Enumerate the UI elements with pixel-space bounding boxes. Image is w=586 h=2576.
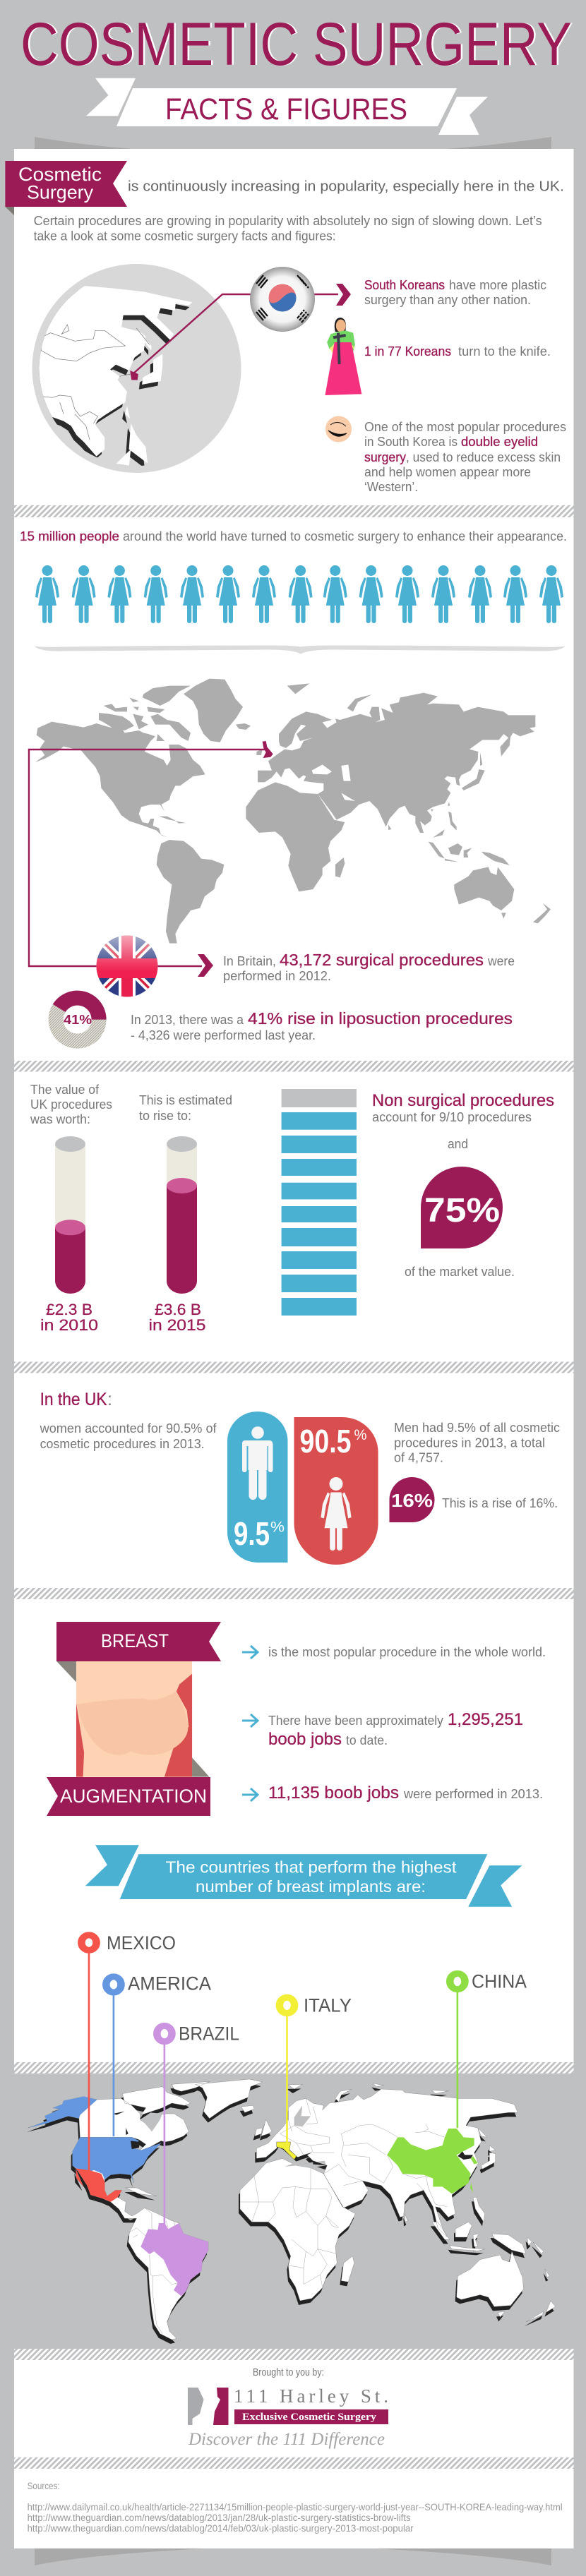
- panel top tabs: [35, 137, 551, 149]
- text: 1 in 77 Koreans: 1 in 77 Koreans: [364, 344, 451, 359]
- text: 41% rise in liposuction: 41% rise in liposuction procedures: [248, 1009, 513, 1028]
- text: women share: [40, 1421, 217, 1451]
- ribbon: BREAST: BREAST: [101, 1630, 169, 1651]
- icon: eye: [325, 416, 352, 442]
- logo: 111 Harley St: Exclusive Cosmetic Surgery: [242, 2412, 377, 2423]
- heading: In the UK: :: [107, 1390, 112, 1409]
- label: China: CHINA: [472, 1970, 527, 1992]
- connector line: Korea to text: [133, 294, 338, 374]
- text: 1,295,251 boob jobs: There have been approximately: [268, 1714, 443, 1728]
- text: sources: Sources:: [28, 2481, 60, 2491]
- panel: main white: [14, 149, 573, 2062]
- text: South Koreans: South Koreans: [364, 278, 445, 292]
- panel: men 9.5%: %: [270, 1519, 285, 1536]
- ribbon: AUGMENTATION: AUGMENTATION: [60, 1786, 207, 1807]
- logo: 111 Harley St: [188, 2385, 388, 2449]
- text: 43,172 surgical procedures: performed in 2012.: [223, 969, 331, 983]
- text: non surgical procedures: Non surgical procedures: [372, 1091, 554, 1110]
- text: sources: http://www.theguardian.com/news/datablog/2014/feb/03/uk-plastic-surgery-2013-most-popular: [28, 2523, 414, 2534]
- intro text: take a look at some cosmetic surgery facts and figures:: [34, 229, 336, 243]
- text: men share: [394, 1421, 560, 1465]
- text: 41% rise in liposuction: In 2013, there was a: [131, 1013, 244, 1027]
- label: 2015 value: in 2015: [148, 1316, 206, 1334]
- connector line: UK to text: [29, 750, 265, 966]
- panel: women 90.5%: [294, 1417, 378, 1565]
- label: 2010 value: £2.3 B: [46, 1301, 92, 1318]
- icon: man: [242, 1426, 273, 1500]
- text: men share: procedures in 2013, a total: [394, 1436, 545, 1450]
- chart: cylinder 2015: [167, 1136, 197, 1294]
- label: 2015 value: [148, 1301, 206, 1334]
- text: brought to you by: Brought to you by:: [253, 2366, 324, 2378]
- text: ribbon heading: number of breast implants are:: [196, 1877, 426, 1896]
- logo: 111 Harley St: Discover the 111 Difference: [188, 2430, 385, 2449]
- arrowhead: UK: [198, 954, 213, 977]
- text: sources: [28, 2481, 563, 2534]
- text: value of UK procedures: [30, 1083, 112, 1126]
- text: 1 in 77 Koreans: [364, 344, 551, 359]
- text: sources: http://www.theguardian.com/news/datablog/2013/jan/28/uk-plastic-surgery-statistics-brow-lifts: [28, 2512, 411, 2523]
- ribbon: highest number of implants: [85, 1845, 522, 1907]
- text: market value: of the market value.: [405, 1265, 515, 1279]
- text: 41% rise in liposuction: - 4,326 were performed last year.: [131, 1028, 316, 1042]
- chart: 41% donut: 41%: [64, 1013, 92, 1027]
- icon: South Korea flag: [250, 267, 315, 332]
- text: 1,295,251 boob jobs: 1,295,251: [448, 1710, 523, 1729]
- map: world grey with UK highlighted: [35, 679, 551, 944]
- text: 15 million people: 15 million people: [20, 529, 119, 543]
- panel: women 90.5%: %: [354, 1427, 367, 1443]
- map: world highlighted countries: [27, 2079, 556, 2344]
- text: non surgical procedures: account for 9/10 procedures: [372, 1110, 532, 1124]
- chart: 41% donut: [53, 991, 107, 1041]
- pin: Mexico: [81, 1935, 97, 2170]
- text: estimated rise: [139, 1093, 232, 1123]
- text: double eyelid: in South Korea is: [364, 435, 458, 449]
- text: double eyelid: ‘Western’.: [364, 480, 418, 494]
- pin: Italy: [280, 1997, 294, 2143]
- text: 11,135 boob jobs: 11,135 boob jobs: [268, 1783, 399, 1802]
- text: 1,295,251 boob jobs: boob jobs: [268, 1730, 342, 1749]
- text: rise of 16%: This is a rise of 16%.: [442, 1496, 558, 1510]
- intro headline: is continuously increasing in popularity, especially here in the UK.: [128, 179, 564, 195]
- panel bottom tabs: [35, 2548, 551, 2565]
- ribbon: AUGMENTATION: [47, 1777, 210, 1816]
- text: South Koreans: surgery than any other nation.: [364, 293, 531, 307]
- arrow: first fact: [242, 1646, 258, 1659]
- label ribbon: Cosmetic Surgery: [5, 161, 127, 215]
- ribbon: BREAST: [56, 1622, 221, 1661]
- text: 15 million people: around the world have turned to cosmetic surgery to enhance their appearance.: [123, 529, 567, 543]
- panel: men 9.5%: [227, 1412, 288, 1563]
- callout: 75%: [421, 1167, 503, 1248]
- text: men share: of 4,757.: [394, 1451, 443, 1465]
- text: double eyelid: surgery: [364, 450, 406, 464]
- icon: woman in hanbok: [325, 318, 361, 395]
- text: estimated rise: This is estimated: [139, 1093, 232, 1107]
- text: ribbon heading: [165, 1858, 457, 1896]
- arrowhead: Korea: [336, 284, 351, 306]
- label: America: AMERICA: [128, 1973, 211, 1994]
- text: men share: Men had 9.5% of all cosmetic: [394, 1421, 560, 1435]
- icon row: 15 women: [35, 565, 563, 623]
- label: Italy: ITALY: [304, 1994, 352, 2016]
- text: 1,295,251 boob jobs: to date.: [346, 1733, 388, 1747]
- text: value of UK procedures: The value of: [30, 1083, 100, 1097]
- pin: America: [106, 1977, 121, 2136]
- brace: [35, 646, 564, 654]
- text: South Koreans: have more plastic: [449, 278, 546, 292]
- label: 2015 value: £3.6 B: [155, 1301, 201, 1318]
- arrow: third fact: [242, 1788, 258, 1801]
- panel: men 9.5%: 9.5: [234, 1515, 270, 1552]
- panel: footer: [14, 2349, 573, 2548]
- text: women share: cosmetic procedures in 2013.: [40, 1437, 205, 1451]
- intro text: Certain procedures are growing in popularity with absolutely no sign of slowing down. Let’s: [34, 214, 542, 228]
- pin: Brazil: [157, 2026, 172, 2224]
- illustration: breast: [56, 1661, 209, 1777]
- label ribbon: Cosmetic Surgery: Cosmetic: [18, 164, 102, 185]
- text: estimated rise: to rise to:: [139, 1109, 191, 1123]
- text: 41% rise in liposuction: [131, 1009, 513, 1042]
- map: east asia globe: [20, 264, 241, 473]
- text: double eyelid: , used to reduce excess skin: [406, 450, 561, 464]
- text: 43,172 surgical procedures: 43,172 surgical procedures: [280, 951, 484, 969]
- text: 43,172 surgical procedures: In Britain,: [223, 954, 276, 968]
- callout: 16%: 16%: [391, 1490, 433, 1511]
- text: double eyelid: double eyelid: [461, 435, 538, 449]
- text: double eyelid: and help women appear more: [364, 465, 531, 479]
- text: 11,135 boob jobs: were performed in 2013.: [403, 1787, 543, 1801]
- icon: UK flag: [96, 935, 158, 997]
- subtitle ribbon: FACTS & FIGURES: [165, 92, 407, 126]
- text: double eyelid: [364, 420, 566, 494]
- text: double eyelid: One of the most popular procedures: [364, 420, 566, 434]
- arrow: second fact: [242, 1714, 258, 1727]
- label: 2010 value: in 2010: [40, 1316, 98, 1334]
- text: 1 in 77 Koreans: turn to the knife.: [458, 344, 551, 359]
- text: most popular procedure: is the most popular procedure in the whole world.: [268, 1645, 546, 1659]
- text: non surgical procedures: and: [448, 1137, 468, 1151]
- text: 11,135 boob jobs: [268, 1783, 543, 1802]
- chart: cylinder 2010: [55, 1136, 85, 1294]
- icon: woman: [321, 1477, 352, 1551]
- text: sources: http://www.dailymail.co.uk/health/article-2271134/15million-people-plastic-surgery-world-just-year--SOUTH-KOREA-leading-way.html: [28, 2502, 563, 2512]
- text: women share: women accounted for 90.5% of: [40, 1421, 217, 1436]
- callout: 75%: 75%: [424, 1192, 500, 1229]
- text: 43,172 surgical procedures: were: [487, 954, 515, 968]
- text: value of UK procedures: UK procedures: [30, 1097, 112, 1112]
- chart: 9 of 10 bars: [282, 1089, 357, 1316]
- callout: 16%: [390, 1477, 435, 1522]
- text: value of UK procedures: was worth:: [30, 1112, 90, 1126]
- text: South Koreans: [364, 278, 546, 307]
- logo: 111 Harley St: 111 Harley St.: [234, 2385, 388, 2407]
- intro text: [34, 214, 542, 243]
- text: ribbon heading: The countries that perform the highest: [165, 1858, 457, 1876]
- label: Mexico: MEXICO: [107, 1932, 176, 1954]
- label: Brazil: BRAZIL: [179, 2023, 239, 2044]
- subtitle ribbon: [86, 78, 488, 135]
- text: 43,172 surgical procedures: [223, 951, 515, 983]
- pin: China: [450, 1973, 465, 2128]
- text: non surgical procedures: [372, 1091, 554, 1151]
- heading: In the UK: In the UK: [40, 1390, 107, 1409]
- panel: women 90.5%: 90.5: [299, 1423, 352, 1459]
- label: 2010 value: [40, 1301, 98, 1334]
- label ribbon: Cosmetic Surgery: Surgery: [27, 182, 93, 203]
- text: 1,295,251 boob jobs: [268, 1710, 523, 1749]
